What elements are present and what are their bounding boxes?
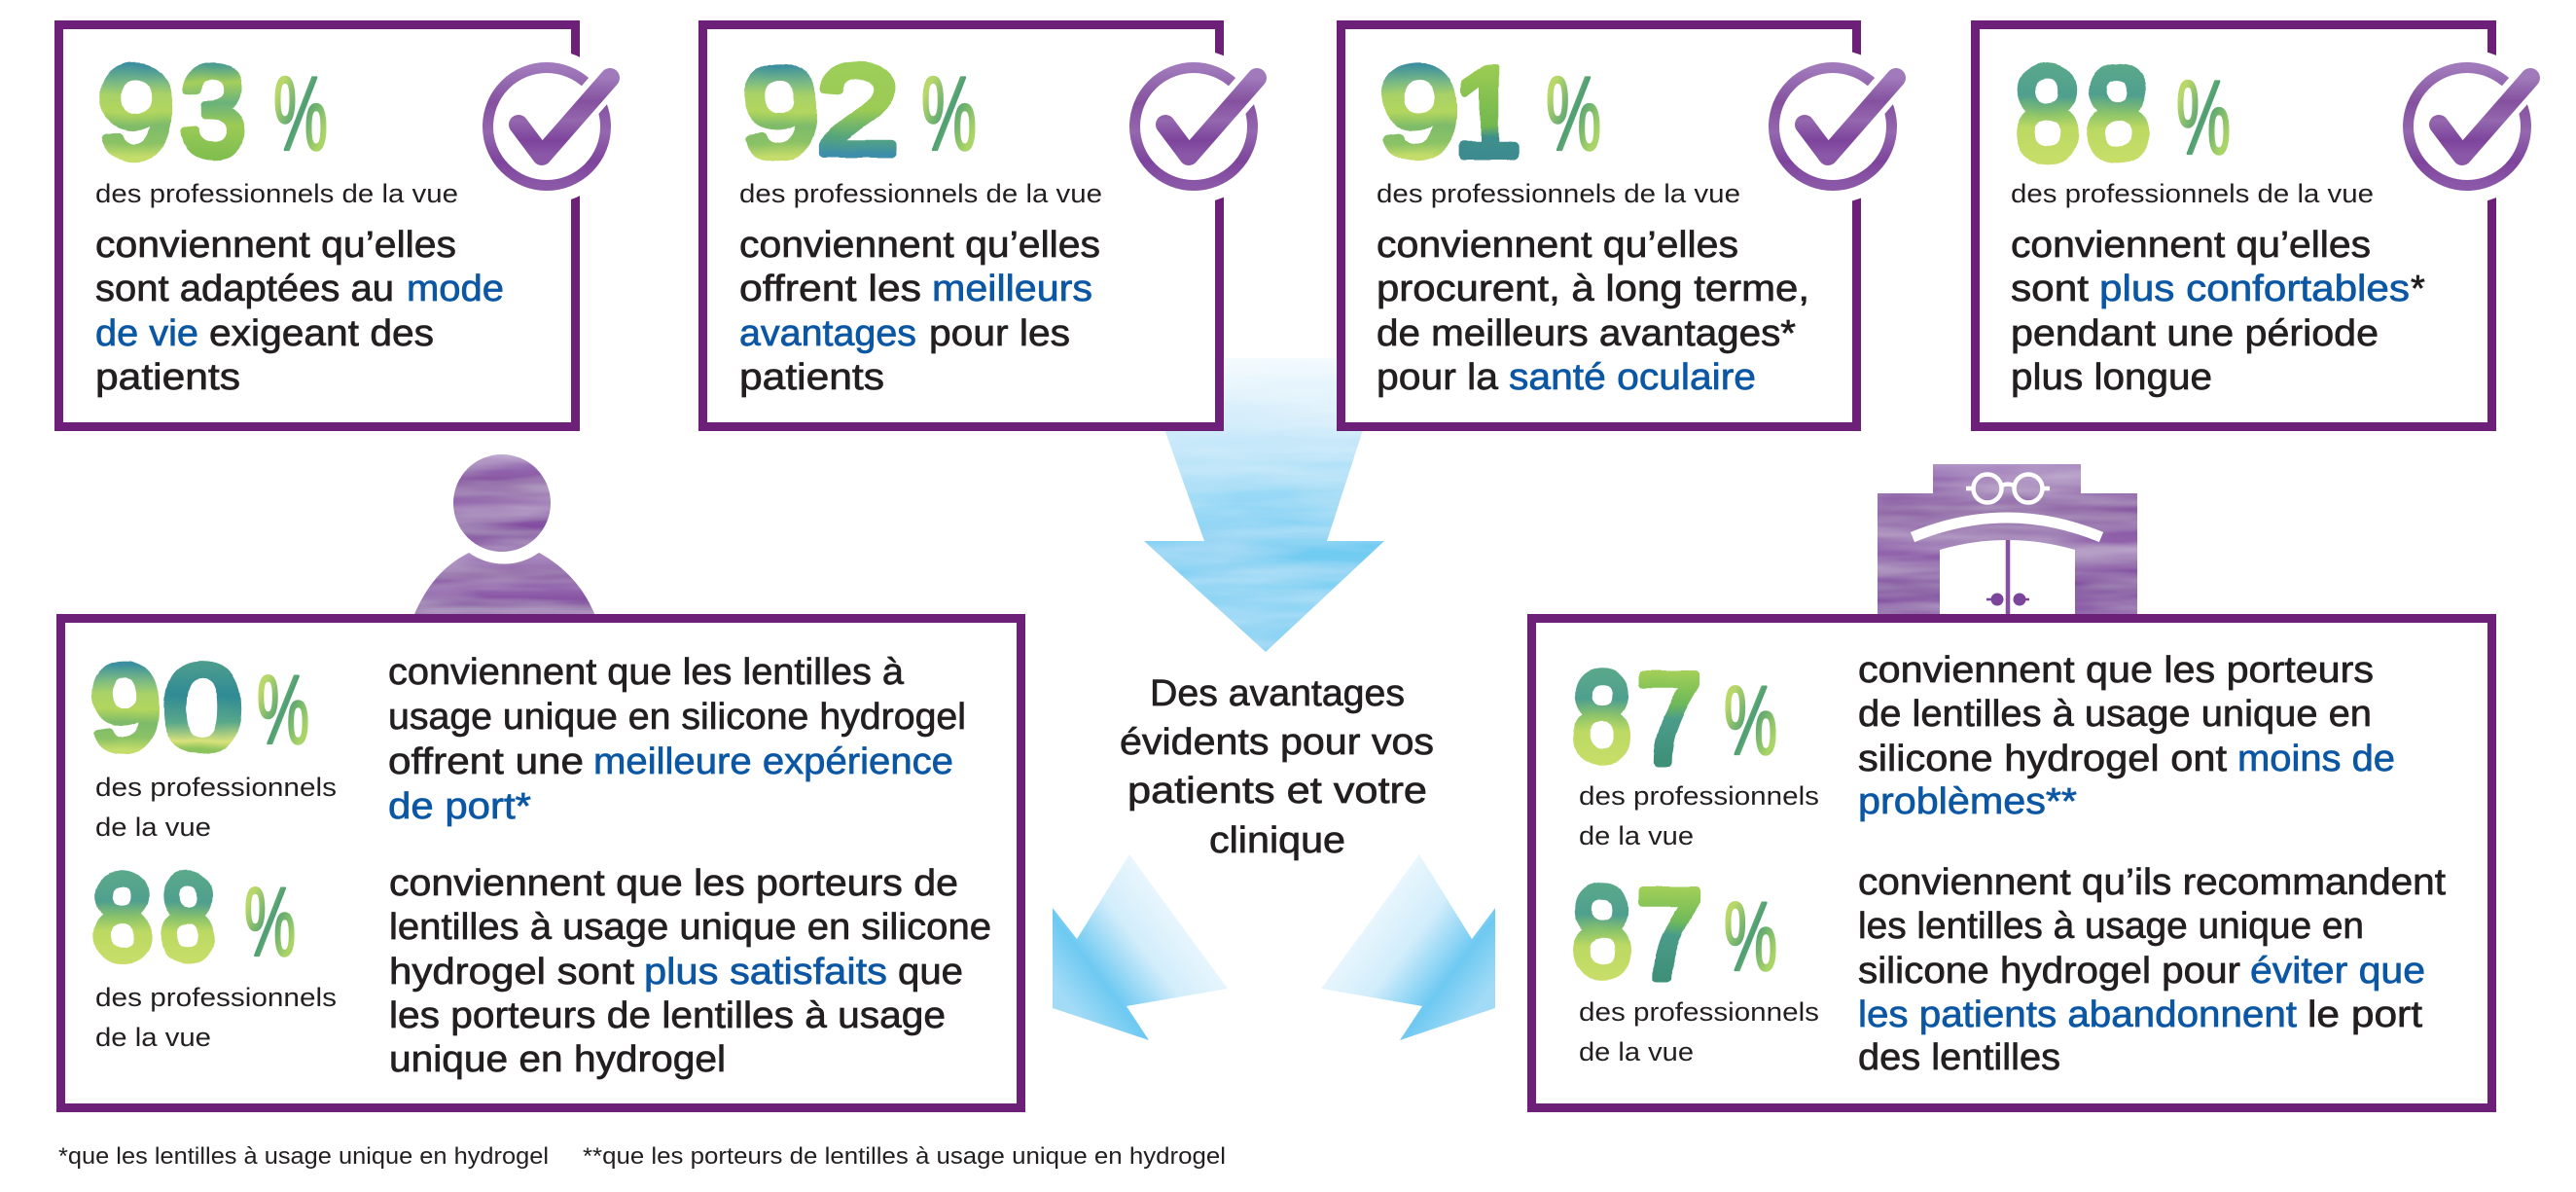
text: statement: plus longue bbox=[2011, 357, 2212, 398]
text: statement bbox=[95, 225, 504, 398]
text: statement: offrent les bbox=[739, 269, 921, 309]
heading: central message: patients et votre bbox=[1127, 771, 1427, 812]
text: statement second 87 % bbox=[1858, 862, 2446, 1078]
panel: 93 % bbox=[58, 25, 624, 426]
arrow: lower right bbox=[1321, 854, 1495, 1040]
text: statement second 87 %: conviennent qu’ils recommandent bbox=[1858, 862, 2446, 903]
stat: 88 %: 8 bbox=[161, 850, 215, 986]
stat: 88 %: % bbox=[244, 868, 296, 977]
text: professionals bbox=[1579, 781, 1819, 850]
text: professionals: de la vue bbox=[95, 1023, 211, 1052]
footnotes: **que les porteurs de lentilles à usage unique en hydrogel bbox=[583, 1143, 1226, 1170]
text: statement: meilleurs bbox=[932, 269, 1092, 309]
text: statement bbox=[1377, 225, 1809, 398]
text: statement: pendant une période bbox=[2011, 313, 2379, 354]
text: professionals: des professionnels de la vue bbox=[739, 179, 1102, 208]
text: statement bbox=[2011, 225, 2425, 398]
text: statement: de vie bbox=[95, 313, 198, 354]
heading: central message bbox=[1120, 673, 1434, 861]
text: professionals: des professionnels de la vue bbox=[2011, 179, 2374, 208]
stat: 87 %: % bbox=[1724, 667, 1777, 776]
text: statement first 87 %: moins de bbox=[2237, 739, 2395, 779]
text: statement first 87 %: silicone hydrogel ont bbox=[1858, 739, 2227, 779]
text: professionals: des professionnels bbox=[95, 983, 337, 1012]
text: statement: santé oculaire bbox=[1509, 357, 1756, 398]
text: professionals bbox=[95, 773, 337, 842]
icon: patient person bbox=[412, 454, 596, 619]
text: statement 88 % bbox=[389, 863, 991, 1080]
text: statement 90 %: conviennent que les lentilles à bbox=[388, 652, 905, 693]
stat: 88 % bbox=[2015, 40, 2231, 187]
text: statement 88 %: hydrogel sont bbox=[389, 952, 634, 993]
text: statement: exigeant des bbox=[209, 313, 434, 354]
text: statement 90 %: offrent une bbox=[388, 741, 584, 782]
stat: 93 %: % bbox=[273, 54, 328, 172]
text: statement second 87 %: éviter que bbox=[2250, 951, 2425, 992]
text: statement: patients bbox=[739, 357, 884, 398]
stat: 91 %: 9 bbox=[1379, 41, 1459, 183]
stat: 90 %: % bbox=[257, 656, 309, 765]
text: statement first 87 % bbox=[1858, 650, 2395, 822]
text: statement first 87 %: conviennent que les porteurs bbox=[1858, 650, 2374, 691]
text: statement: procurent, à long terme, bbox=[1377, 269, 1809, 309]
text: statement 88 %: unique en hydrogel bbox=[389, 1039, 726, 1080]
panel: clinic bbox=[1531, 619, 2492, 1107]
stat: 91 %: % bbox=[1546, 54, 1601, 172]
text: statement first 87 %: de lentilles à usage unique en bbox=[1858, 694, 2372, 735]
text: statement bbox=[739, 225, 1100, 398]
stat: 93 % bbox=[98, 40, 328, 183]
stat: 91 %: 1 bbox=[1454, 41, 1521, 183]
footnotes bbox=[58, 1143, 1226, 1170]
stat: 93 %: 3 bbox=[181, 40, 246, 182]
text: statement 88 %: plus satisfaits bbox=[644, 952, 887, 993]
text: statement 90 %: usage unique en silicone hydrogel bbox=[388, 697, 966, 738]
stat: 88 %: % bbox=[2176, 58, 2231, 176]
footnotes: *que les lentilles à usage unique en hydrogel bbox=[58, 1143, 549, 1170]
panel: patients bbox=[60, 619, 1021, 1107]
text: professionals: des professionnels de la vue bbox=[1377, 179, 1740, 208]
stat: 90 %: 9 bbox=[90, 642, 161, 776]
text: statement second 87 %: les patients abandonnent bbox=[1858, 994, 2297, 1035]
text: professionals: des professionnels bbox=[1579, 997, 1819, 1027]
text: statement: sont adaptées au bbox=[95, 269, 394, 309]
icon: check 3 bbox=[1756, 50, 1910, 203]
text: statement: conviennent qu’elles bbox=[1377, 225, 1738, 266]
text: statement: avantages bbox=[739, 313, 916, 354]
text: statement first 87 %: problèmes** bbox=[1858, 781, 2077, 822]
text: statement 88 %: que bbox=[898, 952, 963, 993]
heading: central message: clinique bbox=[1209, 820, 1345, 861]
text: statement second 87 %: des lentilles bbox=[1858, 1037, 2060, 1078]
text: statement: pour la bbox=[1377, 357, 1499, 398]
stat: second 87 %: % bbox=[1724, 883, 1777, 992]
stat: 93 %: 9 bbox=[98, 41, 175, 183]
panel: 91 % bbox=[1341, 25, 1910, 426]
icon: clinic building bbox=[1878, 464, 2137, 619]
stat: second 87 % bbox=[1573, 860, 1777, 1006]
text: statement second 87 %: le port bbox=[2308, 994, 2422, 1035]
text: statement: conviennent qu’elles bbox=[2011, 225, 2371, 266]
text: statement second 87 %: les lentilles à usage unique en bbox=[1858, 906, 2364, 947]
icon: check 4 bbox=[2390, 50, 2544, 203]
text: statement: mode bbox=[407, 269, 504, 309]
text: statement: patients bbox=[95, 357, 240, 398]
stat: 88 %: 8 bbox=[2086, 40, 2150, 187]
text: statement: plus confortables bbox=[2099, 269, 2410, 309]
stat: 88 %: 8 bbox=[2015, 40, 2080, 187]
text: statement: sont bbox=[2011, 269, 2089, 309]
text: professionals: de la vue bbox=[1579, 1037, 1694, 1066]
stat: 88 %: 8 bbox=[92, 850, 153, 986]
text: statement 90 %: de port* bbox=[388, 786, 531, 827]
text: statement second 87 %: silicone hydrogel pour bbox=[1858, 951, 2240, 992]
stat: 87 %: 7 bbox=[1636, 647, 1701, 789]
stat: 92 %: 2 bbox=[817, 39, 899, 181]
arrow: lower left bbox=[1053, 854, 1228, 1040]
panel: 88 % bbox=[1975, 25, 2544, 426]
text: statement 88 %: lentilles à usage unique en silicone bbox=[389, 907, 991, 948]
icon: check 2 bbox=[1117, 50, 1270, 203]
stat: second 87 %: 7 bbox=[1636, 864, 1701, 1006]
text: statement: * bbox=[2411, 269, 2425, 309]
heading: central message: Des avantages bbox=[1150, 673, 1405, 714]
text: statement: conviennent qu’elles bbox=[95, 225, 456, 266]
text: statement 90 %: meilleure expérience bbox=[593, 741, 953, 782]
heading: central message: évidents pour vos bbox=[1120, 722, 1434, 763]
stat: 92 % bbox=[742, 39, 977, 183]
panel: 92 % bbox=[702, 25, 1270, 426]
text: statement: conviennent qu’elles bbox=[739, 225, 1100, 266]
text: professionals: de la vue bbox=[95, 813, 211, 842]
stat: 92 %: % bbox=[921, 54, 977, 172]
stat: 90 % bbox=[90, 642, 309, 776]
text: professionals bbox=[95, 983, 337, 1052]
stat: second 87 %: 8 bbox=[1573, 860, 1631, 1002]
stat: 87 % bbox=[1573, 645, 1777, 789]
text: statement 88 %: les porteurs de lentilles à usage bbox=[389, 995, 946, 1036]
stat: 87 %: 8 bbox=[1573, 645, 1631, 787]
arrow: main down arrow bbox=[1139, 358, 1386, 652]
text: statement 90 % bbox=[388, 652, 966, 827]
text: professionals: de la vue bbox=[1579, 821, 1694, 850]
text: statement 88 %: conviennent que les porteurs de bbox=[389, 863, 958, 904]
text: professionals: des professionnels bbox=[95, 773, 337, 802]
stat: 91 % bbox=[1379, 41, 1601, 183]
text: professionals: des professionnels bbox=[1579, 781, 1819, 811]
text: statement: de meilleurs avantages* bbox=[1377, 313, 1796, 354]
text: professionals bbox=[1579, 997, 1819, 1066]
text: statement: pour les bbox=[929, 313, 1070, 354]
text: professionals: des professionnels de la vue bbox=[95, 179, 458, 208]
stat: 90 %: 0 bbox=[163, 642, 241, 776]
stat: 92 %: 9 bbox=[742, 41, 819, 183]
stat: 88 % bbox=[92, 850, 296, 986]
icon: check 1 bbox=[470, 50, 624, 203]
